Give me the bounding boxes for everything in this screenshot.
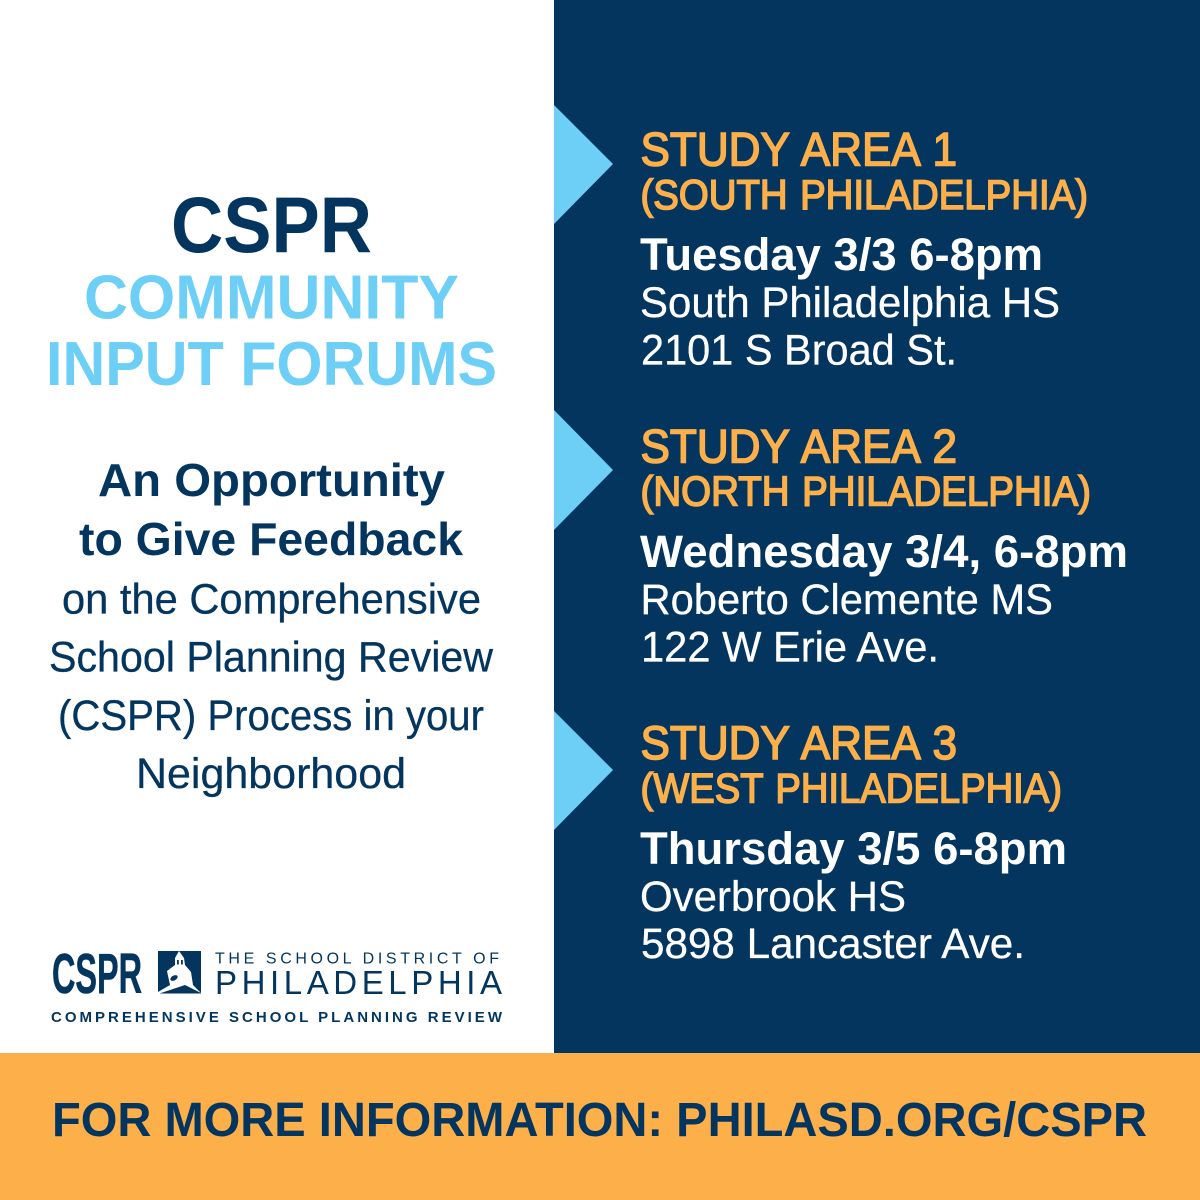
logo wordmark: CSPR: CSPR xyxy=(52,942,142,1006)
venue: Roberto Clemente MS xyxy=(640,576,1053,624)
description text xyxy=(49,576,493,798)
title: CSPR xyxy=(171,180,372,269)
date and time: Tuesday 3/3 6-8pm xyxy=(640,229,1043,280)
panel: study area 1 xyxy=(554,105,1088,374)
date and time: Wednesday 3/4, 6-8pm xyxy=(640,526,1128,577)
arrow: study area 3 xyxy=(554,711,613,830)
logo text: Comprehensive School Planning Review: COMPREHENSIVE SCHOOL PLANNING REVIEW xyxy=(51,1009,503,1026)
heading: study area 3: STUDY AREA 3 xyxy=(640,717,957,770)
logo text: Philadelphia: PHILADELPHIA xyxy=(215,964,502,1001)
logo: CSPR and School District of Philadelphia xyxy=(51,942,503,1026)
subheading: to Give Feedback xyxy=(79,513,463,565)
address: 5898 Lancaster Ave. xyxy=(641,920,1025,968)
panel: study area 2 xyxy=(554,410,1128,672)
subheading xyxy=(79,454,463,565)
heading: study area 1: STUDY AREA 1 xyxy=(640,124,957,176)
arrow: study area 2 xyxy=(554,410,613,530)
address: 122 W Erie Ave. xyxy=(641,624,939,672)
subheading: west philadelphia: (WEST PHILADELPHIA) xyxy=(640,764,1062,812)
icon: school bell tower xyxy=(158,951,201,994)
address: 2101 S Broad St. xyxy=(641,326,957,374)
venue: South Philadelphia HS xyxy=(640,279,1060,327)
date and time: Thursday 3/5 6-8pm xyxy=(640,823,1067,874)
panel: footer banner xyxy=(0,1053,1200,1200)
subheading: north philadelphia: (NORTH PHILADELPHIA) xyxy=(640,468,1091,514)
subheading: south philadelphia: (SOUTH PHILADELPHIA) xyxy=(640,171,1088,218)
title: INPUT FORUMS xyxy=(46,330,497,399)
heading: study area 2: STUDY AREA 2 xyxy=(640,420,957,474)
panel: white left background xyxy=(0,0,554,1053)
title: COMMUNITY xyxy=(84,264,459,332)
arrow: study area 1 xyxy=(554,105,613,224)
description text: School Planning Review xyxy=(49,634,493,682)
footer call to action: FOR MORE INFORMATION: PHILASD.ORG/CSPR xyxy=(52,1094,1147,1147)
title xyxy=(46,180,497,399)
venue: Overbrook HS xyxy=(640,873,906,921)
panel: study area 3 xyxy=(554,711,1067,968)
subheading: An Opportunity xyxy=(98,454,445,506)
description text: Neighborhood xyxy=(136,751,406,798)
panel: navy schedule background xyxy=(554,0,1200,1053)
description text: on the Comprehensive xyxy=(62,576,481,624)
panel: intro column xyxy=(46,180,503,1026)
description text: (CSPR) Process in your xyxy=(58,693,484,740)
logo text: The School District of: THE SCHOOL DISTRICT OF xyxy=(215,950,499,968)
